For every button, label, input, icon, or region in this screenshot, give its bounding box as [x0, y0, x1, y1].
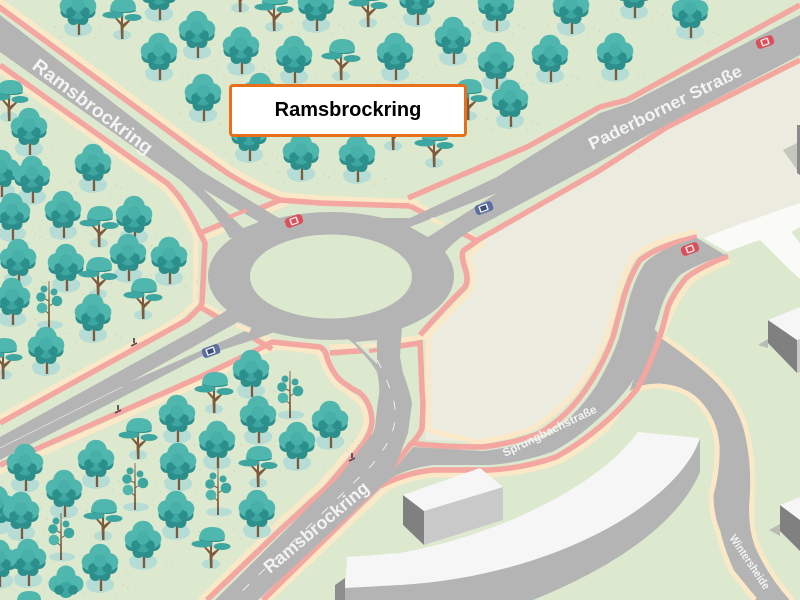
title label: Ramsbrockring [275, 99, 421, 121]
east block lower [769, 497, 800, 551]
roundabout centre island [250, 234, 412, 318]
street name: Sprungbachstraße: Sprungbachstraße [501, 404, 599, 460]
cars and cyclists [115, 34, 775, 461]
trees: western forest [0, 80, 198, 380]
white driveway [703, 203, 800, 279]
buildings [335, 125, 800, 600]
east block upper [783, 125, 800, 175]
trees: southern forest [0, 350, 359, 600]
low block [403, 468, 503, 545]
road: Wintersheide [628, 325, 793, 600]
street name: Ramsbrockring north-west: Ramsbrockring [28, 55, 157, 159]
street name: Ramsbrockring south: Ramsbrockring [260, 478, 373, 577]
east block middle [758, 307, 800, 373]
splitter islands [130, 189, 497, 382]
beige construction lot [425, 60, 800, 442]
trees: northern forest [54, 0, 719, 186]
roundabout [208, 212, 454, 340]
centre line markings [0, 360, 395, 595]
title label [229, 84, 467, 137]
curved building [335, 432, 700, 600]
street name: Wintersheide: Wintersheide [727, 533, 772, 592]
street name: Paderborner Straße: Paderborner Straße [585, 61, 745, 154]
